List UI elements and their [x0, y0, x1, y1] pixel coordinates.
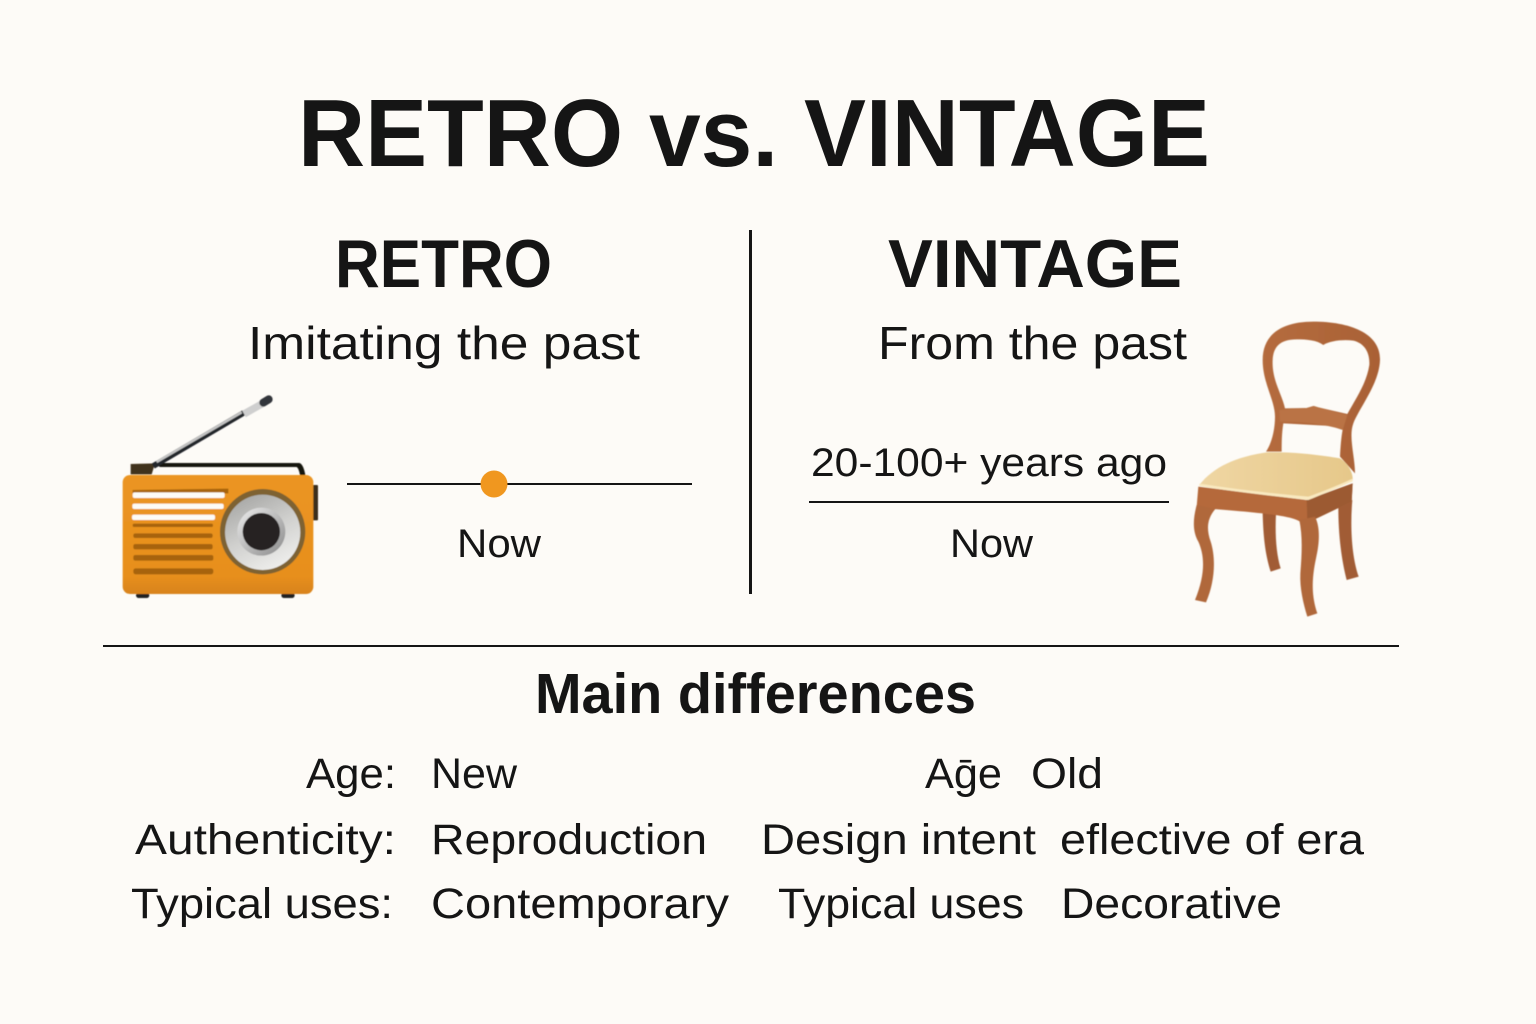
section heading: main differences: Main differences [535, 662, 976, 726]
table: vintage differences [761, 750, 1364, 928]
horizontal divider [103, 645, 1399, 647]
row: design intent: Design intent [761, 816, 1036, 864]
vintage heading: VINTAGE [888, 226, 1182, 302]
value: contemporary: Contemporary [431, 880, 730, 928]
row: authenticity: Authenticity: [135, 816, 396, 864]
value: reproduction: Reproduction [431, 816, 707, 864]
icon: wooden chair [1194, 322, 1380, 617]
value: reflective of era: eflective of era [1060, 816, 1364, 864]
table: retro differences [131, 750, 730, 928]
panel: retro [123, 226, 692, 598]
vertical divider [749, 230, 752, 594]
title: RETRO vs. VINTAGE [298, 80, 1210, 187]
timeline: vintage [809, 501, 1169, 503]
row: age: Aḡe [925, 750, 1002, 798]
row: typical uses: Typical uses [778, 880, 1024, 928]
label: now: Now [457, 522, 541, 566]
retro subtitle: Imitating the past [248, 317, 640, 369]
row: age: Age: [306, 750, 396, 798]
vintage subtitle: From the past [878, 317, 1187, 369]
icon: orange radio [123, 399, 318, 598]
panel: vintage [809, 226, 1380, 617]
label: now: Now [950, 522, 1033, 566]
row: typical uses: Typical uses: [131, 880, 393, 928]
timeline label: years ago: 20-100+ years ago [811, 441, 1167, 485]
value: decorative: Decorative [1061, 880, 1282, 928]
value: old: Old [1031, 750, 1103, 798]
retro heading: RETRO [335, 226, 552, 302]
timeline: retro now [347, 470, 692, 498]
value: new: New [431, 750, 518, 798]
